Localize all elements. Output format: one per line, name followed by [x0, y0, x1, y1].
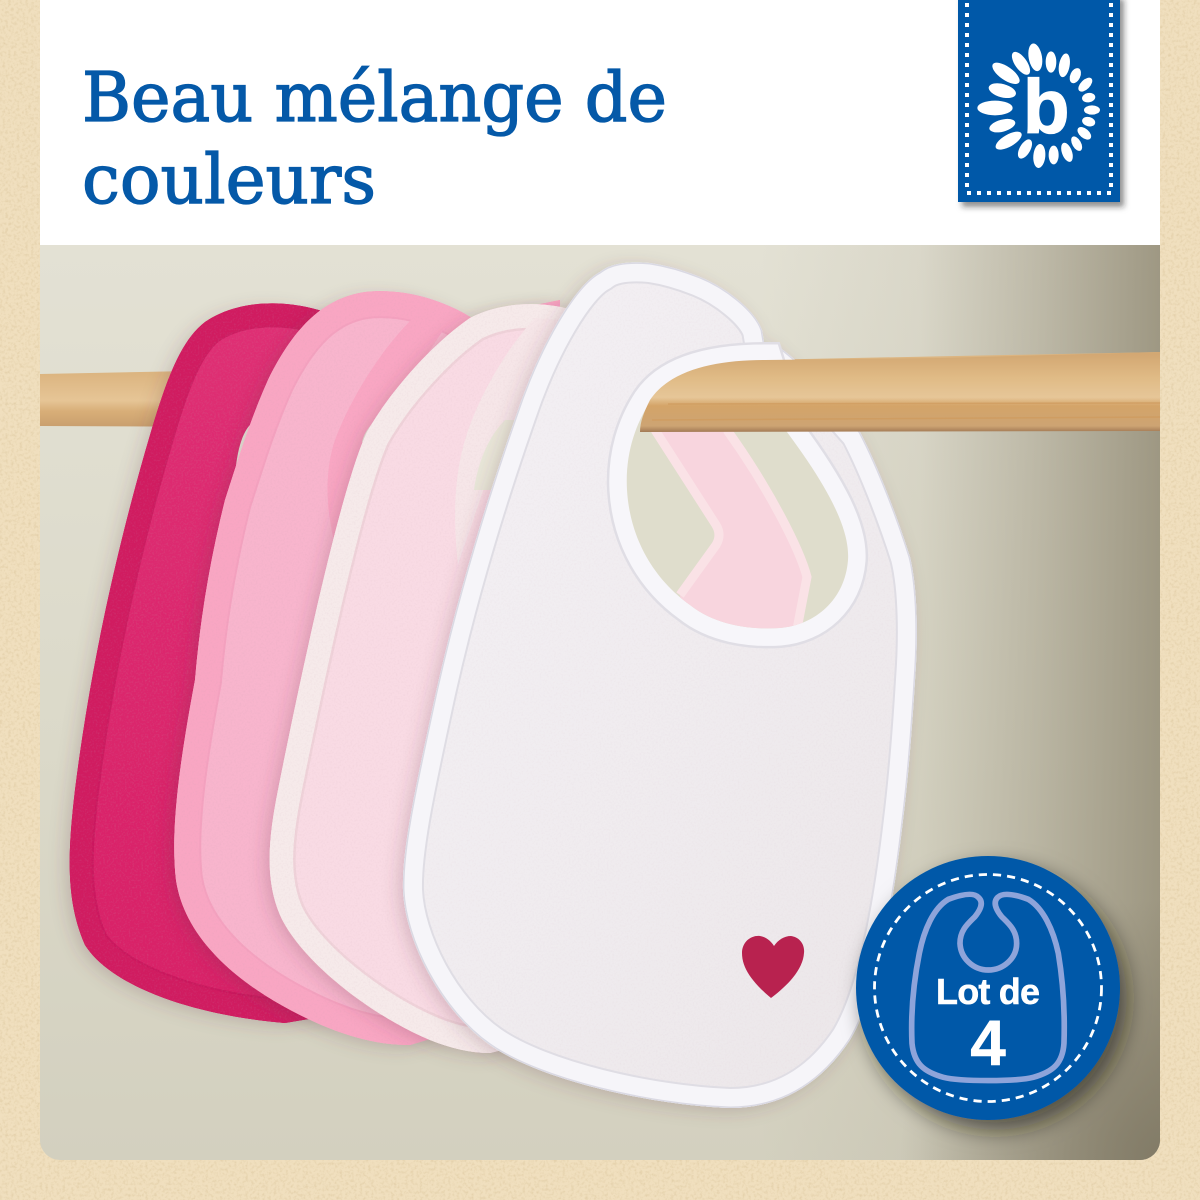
bib: pink — [174, 291, 560, 1045]
wall background — [40, 245, 1160, 1160]
wooden rod front section — [640, 352, 1160, 432]
badge text: Lot de — [936, 971, 1040, 1012]
title: couleurs — [82, 141, 376, 220]
icon: flower logo: b — [1023, 64, 1069, 149]
bib: dark pink — [58, 300, 323, 1033]
badge text: 4 — [970, 1007, 1006, 1079]
white header panel — [40, 0, 1160, 245]
icon: flower logo — [977, 42, 1100, 168]
badge: lot de 4 — [856, 856, 1120, 1120]
bib: white with heart — [403, 262, 917, 1108]
icon: embroidered heart — [742, 936, 804, 998]
icon: bib outline — [912, 894, 1064, 1081]
title — [82, 59, 667, 220]
wooden rod — [40, 352, 1160, 431]
photo panel — [40, 245, 1160, 1160]
bib: light pink — [258, 301, 568, 1063]
neck hole — [627, 362, 848, 650]
badge text — [936, 971, 1040, 1079]
logo label — [958, 0, 1120, 202]
title: Beau mélange de — [82, 59, 667, 138]
